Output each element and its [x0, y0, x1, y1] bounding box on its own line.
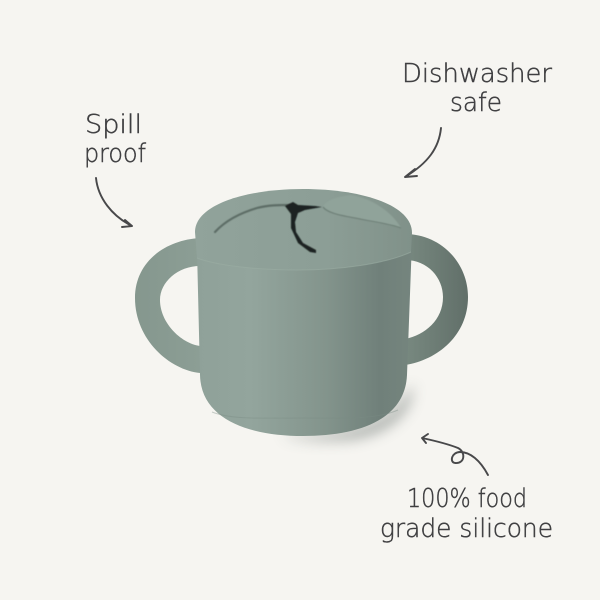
flap lower edge	[323, 207, 401, 228]
arrow: spill proof	[96, 178, 132, 227]
label: Dishwasher safe: safe	[450, 88, 502, 118]
label: Spill proof	[84, 110, 147, 169]
label: 100% food grade silicone: 100% food	[407, 484, 527, 514]
label: Dishwasher safe	[402, 59, 552, 118]
centre opening	[285, 202, 322, 253]
label: Dishwasher safe: Dishwasher	[402, 59, 552, 89]
label: Spill proof: Spill	[85, 110, 142, 140]
base seam	[212, 410, 398, 418]
lid	[195, 189, 412, 270]
arrow: food grade silicone	[422, 434, 488, 475]
right flap	[323, 195, 401, 228]
lid rim highlight	[197, 252, 411, 270]
cup body	[197, 240, 412, 436]
left slit	[215, 205, 290, 232]
right handle	[405, 234, 468, 365]
cup shadow	[280, 385, 412, 440]
label: 100% food grade silicone: grade silicone	[380, 514, 553, 544]
left handle	[135, 238, 200, 373]
label: 100% food grade silicone	[380, 484, 553, 544]
arrow: dishwasher safe	[405, 128, 441, 177]
product: snack cup	[135, 189, 468, 440]
label: Spill proof: proof	[84, 139, 147, 169]
